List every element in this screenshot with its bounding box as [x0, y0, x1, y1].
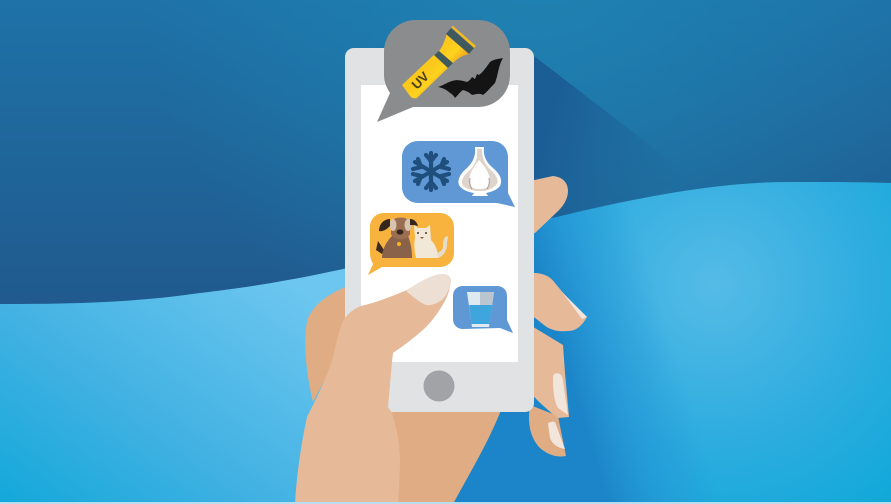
thumbnail [406, 274, 451, 305]
icon: brown dog [376, 218, 418, 258]
phone cast shadow [534, 56, 690, 240]
hand: second finger [530, 273, 587, 331]
hand: palm behind phone [380, 405, 503, 504]
phone body [345, 48, 534, 412]
bottom light edge [0, 502, 891, 504]
icon: garlic bulb [458, 147, 501, 196]
icon: snowflake [413, 153, 449, 190]
hand: back of hand shading [305, 287, 346, 402]
message bubble: dog and cat [368, 213, 454, 275]
hand: thumb and wrist in front of phone [295, 274, 451, 504]
phone screen [361, 85, 518, 362]
hand: top finger behind phone [530, 176, 568, 233]
message bubble: UV flashlight and bat [377, 20, 510, 122]
icon: bat [438, 58, 503, 98]
message bubble: glass of water [453, 286, 513, 333]
message bubble: snowflake and garlic [402, 141, 515, 207]
icon: UV flashlight: UV [409, 69, 432, 92]
hand: little finger [529, 405, 566, 457]
icon: white cat [414, 225, 448, 258]
background: dark blue upper field [0, 0, 891, 320]
phone home button [424, 370, 454, 402]
icon: water glass [467, 292, 494, 327]
background: light blue wave [0, 182, 891, 504]
hand: third finger [530, 325, 569, 418]
